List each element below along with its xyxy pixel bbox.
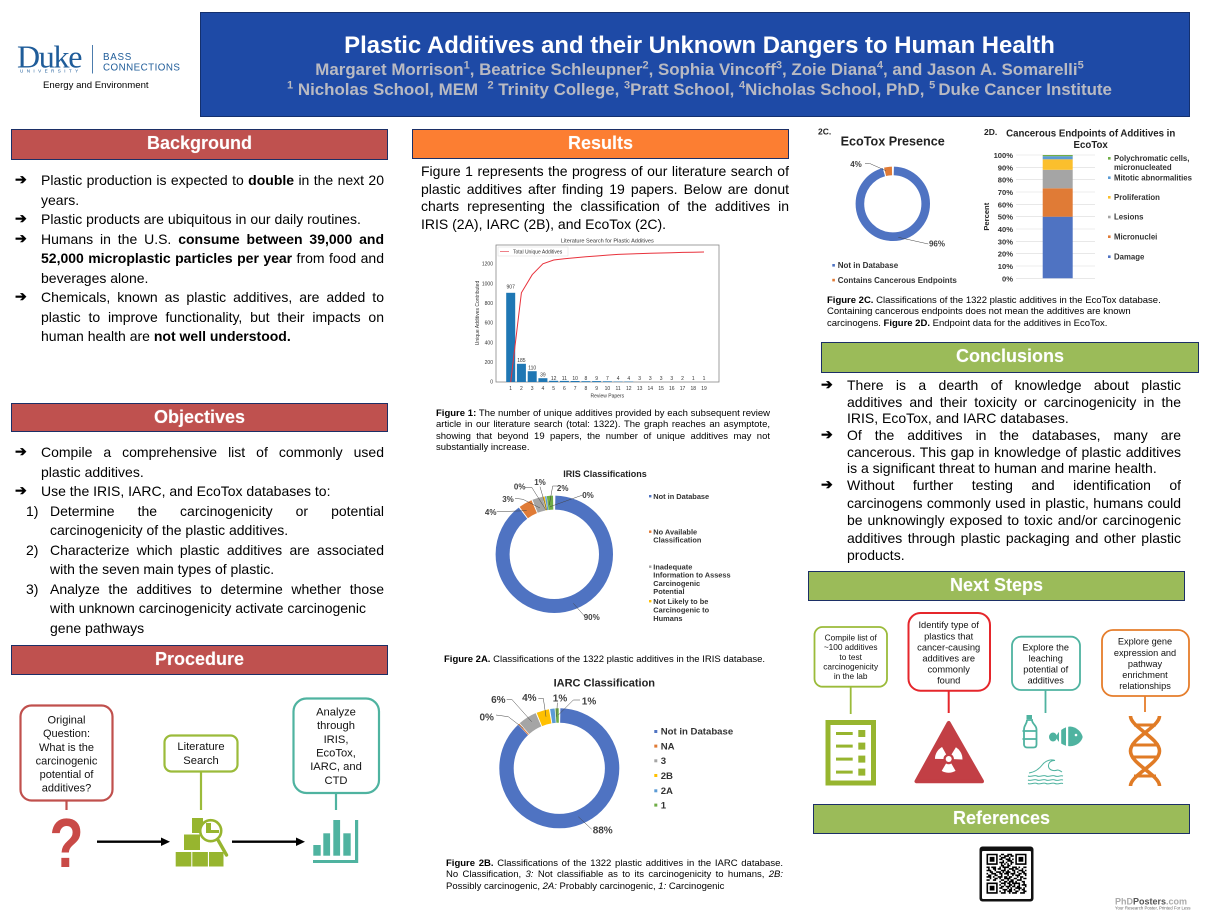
heading: references — [813, 804, 1190, 834]
icon: fish — [1049, 726, 1083, 747]
caption: figure 2B — [446, 858, 783, 892]
callout: original question — [20, 706, 112, 810]
panel: objectives — [11, 403, 388, 636]
caption: figure 1: article in our literature search (total: 1322). The graph reaches an asymptote, — [436, 419, 770, 430]
callout: original question: What is the — [39, 742, 94, 754]
chart: literature search bar and line chart: 10 — [572, 376, 578, 382]
caption: figure 1: Figure 1: The number of unique additives provided by each subsequent review — [436, 408, 770, 419]
chart: cancerous endpoints stacked bar: 30% — [998, 237, 1013, 246]
text block: background bullets: human health are not well understood. — [41, 328, 291, 344]
flow diagram: procedure — [19, 697, 380, 882]
callout: identify plastics — [908, 613, 990, 713]
chart: IRIS classifications donut: 90% — [584, 613, 600, 622]
chart: cancerous endpoints stacked bar: 60% — [998, 200, 1013, 209]
logo: PhDPosters: PhDPosters.com — [1115, 896, 1187, 906]
chart: literature search bar and line chart: 2 — [681, 376, 684, 382]
heading: procedure: Procedure — [155, 649, 244, 669]
caption: figures 2C and 2D — [827, 295, 1161, 329]
panel: background — [11, 129, 388, 344]
callout: analyze: Analyze — [316, 706, 356, 718]
callout: original question: Question: — [43, 728, 90, 740]
chart: literature search bar and line chart: 9 — [595, 386, 598, 392]
chart: cancerous endpoints stacked bar: Micronuclei — [1114, 232, 1157, 241]
text block: objectives list: Use the IRIS, IARC, and EcoTox databases to: — [41, 483, 330, 499]
chart: IARC classification donut: NA — [661, 741, 675, 752]
chart: IRIS classifications donut: Carcinogenic — [653, 579, 700, 588]
chart: cancerous endpoints stacked bar — [982, 127, 1193, 283]
callout: gene expression: Explore gene — [1118, 637, 1172, 647]
icon: wave — [1028, 760, 1063, 784]
text block: results intro: Figure 1 represents the progress of our literature search of — [421, 163, 789, 179]
callout: leaching potential — [1012, 637, 1080, 713]
callout: literature search — [164, 736, 238, 810]
text block: conclusions bullets: ➔ — [821, 377, 833, 393]
callout: analyze: CTD — [324, 775, 348, 787]
text block: results intro: charts representing the classification of the additives in — [421, 198, 789, 214]
text block: objectives list: ➔ — [15, 444, 27, 460]
text block: conclusions bullets: additives and their toxicity or carcinogenicity in the — [847, 394, 1181, 410]
panel: next steps — [808, 571, 1190, 786]
chart: literature search bar and line chart: 5 — [552, 386, 555, 392]
chart: cancerous endpoints stacked bar: EcoTox — [1074, 140, 1108, 151]
callout: leaching potential: additives — [1028, 676, 1064, 686]
chart: IRIS classifications donut: Potential — [653, 587, 685, 596]
chart: IARC classification donut: 2A — [661, 786, 673, 797]
chart: IRIS classifications donut: 2% — [557, 484, 568, 493]
chart: cancerous endpoints stacked bar: 20% — [998, 250, 1013, 259]
text block: background bullets: Humans in the U.S. consume between 39,000 and — [41, 230, 384, 246]
text block: objectives list: plastic additives. — [41, 464, 144, 480]
chart: IRIS classifications donut: Carcinogenic to — [653, 606, 710, 615]
chart: EcoTox presence donut: Contains Cancerous Endpoints — [838, 276, 957, 285]
chart: literature search bar and line chart: 1200 — [482, 262, 493, 268]
callout: literature search: Search — [183, 755, 219, 767]
chart: cancerous endpoints stacked bar: Percent — [982, 202, 991, 231]
chart: IRIS classifications donut: 0% — [514, 482, 525, 492]
chart: IRIS classifications donut: 1% — [534, 478, 546, 487]
chart: literature search bar and line chart: Total Unique Additives — [513, 249, 563, 255]
caption: figure 1: showing that beyond 19 papers, the number of unique additives may not — [436, 431, 770, 442]
chart: literature search bar and line chart: 3 — [531, 386, 534, 392]
heading: objectives: Objectives — [154, 407, 245, 427]
chart: literature search bar and line chart: 185 — [517, 358, 526, 364]
heading: conclusions — [821, 342, 1199, 373]
chart: cancerous endpoints stacked bar: Mitotic abnormalities — [1114, 173, 1193, 182]
heading: conclusions: Conclusions — [956, 346, 1064, 366]
text block: background bullets: ➔ — [15, 211, 27, 227]
chart: IARC classification donut: 2B — [661, 771, 673, 782]
text block: background bullets: beverages alone. — [41, 270, 148, 286]
heading: background: Background — [147, 133, 252, 153]
icon: bottle — [1022, 715, 1036, 748]
text block: background bullets: Plastic production is expected to double in the next 20 — [41, 172, 384, 188]
callout: analyze — [294, 698, 379, 810]
chart: literature search bar and line chart: 110 — [528, 366, 536, 372]
icon: boxes and magnifier — [176, 818, 226, 866]
caption: figure 2B: No Classification, 3: Not classifiable as to its carcinogenicity to humans, 2B: — [446, 869, 783, 880]
chart: IARC classification donut: 6% — [491, 695, 506, 706]
callout: original question: Original — [48, 714, 85, 726]
icon: checklist — [828, 722, 874, 783]
text block: conclusions bullets: be unknowingly exposed to toxic and/or carcinogenic — [847, 512, 1181, 528]
callout: analyze: EcoTox, — [316, 748, 356, 760]
text block: conclusions bullets: additives through plastic packaging and other plastic — [847, 530, 1181, 546]
chart: cancerous endpoints stacked bar: Proliferation — [1114, 193, 1160, 202]
chart: literature search bar and line chart: 3 — [660, 376, 663, 382]
chart: IRIS classifications donut: IRIS Classifications — [563, 469, 647, 479]
chart: literature search bar and line chart: 600 — [485, 321, 493, 327]
QR code — [980, 846, 1034, 902]
chart: cancerous endpoints stacked bar: 70% — [998, 188, 1013, 197]
icon: bar chart — [313, 820, 358, 863]
arrow: search to analysis — [232, 838, 305, 846]
chart: literature search bar and line chart: 2 — [520, 386, 523, 392]
text block: conclusions bullets: Of the additives in the databases, many are — [847, 427, 1181, 443]
chart: IRIS classifications donut: 3% — [502, 495, 514, 504]
text block: objectives list: carcinogenicity of the plastic additives. — [50, 522, 288, 538]
text block: objectives list: Compile a comprehensive list of commonly used — [41, 444, 384, 460]
chart: literature search bar and line chart: 12 — [626, 386, 632, 392]
logo: Duke University Bass Connections: Energy and Environment — [43, 80, 149, 91]
chart: EcoTox presence donut: 96% — [929, 240, 945, 248]
text block: conclusions bullets: ➔ — [821, 427, 833, 443]
chart: literature search bar and line chart: 3 — [649, 376, 652, 382]
text block: objectives list: 1) — [26, 502, 38, 518]
chart: literature search bar and line chart: 19 — [701, 386, 707, 392]
chart: literature search bar and line chart: 13 — [637, 386, 643, 392]
chart: cancerous endpoints stacked bar: 10% — [998, 262, 1013, 271]
callout: analyze: IRIS, — [324, 734, 348, 746]
text block: conclusions bullets: is a significant threat to human and marine health. — [847, 460, 1157, 476]
chart: literature search bar and line chart: 17 — [680, 386, 685, 392]
chart: literature search bar and line chart: 1 — [692, 376, 695, 382]
title banner — [200, 12, 1190, 117]
text block: objectives list: gene pathways — [50, 620, 144, 636]
chart: IARC classification donut — [479, 678, 733, 837]
chart: EcoTox presence donut — [818, 126, 957, 285]
chart: EcoTox presence donut: 4% — [850, 160, 862, 169]
text block: results intro — [421, 163, 789, 232]
chart: literature search bar and line chart: 3 — [670, 376, 673, 382]
heading: background — [11, 129, 388, 160]
text block: conclusions bullets: IRIS, EcoTox, and IARC databases. — [847, 410, 1069, 426]
caption: figure 2B: Possibly carcinogenic, 2A: Probably carcinogenic, 1: Carcinogenic — [446, 881, 724, 892]
callout: leaching potential: leaching — [1029, 653, 1063, 663]
chart: literature search bar and line chart: 400 — [485, 340, 493, 346]
chart: IRIS classifications donut: Humans — [653, 614, 682, 623]
text block: conclusions bullets: cancerous. This gap in knowledge of plastic additives — [847, 444, 1181, 460]
text block: conclusions bullets: Without further testing and identification of — [847, 477, 1181, 493]
chart: literature search bar and line chart: 1000 — [482, 281, 493, 287]
callout: gene expression: relationships — [1119, 681, 1171, 691]
authors: Margaret Morrison1, Beatrice Schleupner2, Sophia Vincoff3, Zoie Diana4, and Jason A. Somarelli5 — [315, 59, 1084, 79]
chart: literature search bar and line chart: 0 — [490, 380, 493, 386]
caption: figure 1: substantially increase. — [436, 442, 529, 453]
chart: IRIS classifications donut: No Available — [653, 527, 697, 536]
chart: cancerous endpoints stacked bar: Polychromatic cells, — [1114, 154, 1189, 163]
text block: conclusions bullets: ➔ — [821, 477, 833, 493]
chart: cancerous endpoints stacked bar: 50% — [998, 213, 1013, 222]
chart: literature search bar and line chart: 8 — [585, 376, 588, 382]
chart: literature search bar and line chart: 4 — [542, 386, 545, 392]
text block: objectives list: 3) — [26, 580, 38, 596]
text block: background bullets: ➔ — [15, 289, 27, 305]
caption: figures 2C and 2D: Figure 2C. Classifications of the 1322 plastic additives in the EcoTox database. — [827, 295, 1161, 306]
caption: figures 2C and 2D: Containing cancerous endpoints does not mean the additives are known — [827, 306, 1131, 317]
chart: IRIS classifications donut — [485, 469, 731, 623]
text block: results intro: IRIS (2A), IARC (2B), and EcoTox (2C). — [421, 216, 666, 232]
chart: literature search bar and line chart: 14 — [648, 386, 653, 392]
callout: compile list: in the lab — [834, 671, 868, 681]
chart: literature search bar and line chart: 200 — [485, 360, 493, 366]
chart: literature search bar and line chart: 15 — [658, 386, 664, 392]
logo: Duke University Bass Connections — [17, 38, 180, 91]
chart: IARC classification donut: Not in Database — [661, 727, 733, 738]
callout: leaching potential: Explore the — [1022, 642, 1069, 652]
text block: objectives list: with the seven main types of plastic. — [50, 561, 274, 577]
text block: background bullets — [15, 172, 384, 344]
chart: IRIS classifications donut: Information to Assess — [653, 571, 731, 580]
callout: leaching potential: potential of — [1023, 664, 1069, 674]
chart: cancerous endpoints stacked bar: micronucleated — [1114, 163, 1172, 172]
chart: IARC classification donut: 1 — [661, 800, 667, 811]
panel: conclusions — [821, 342, 1199, 563]
text block: results intro: plastic additives after finding 19 papers. Below are donut — [421, 180, 789, 196]
heading: references: References — [953, 808, 1050, 828]
callout: gene expression — [1102, 630, 1189, 712]
caption: figure 2A: Figure 2A. Classifications of the 1322 plastic additives in the IRIS database. — [444, 654, 765, 665]
chart: literature search bar and line chart: Literature Search for Plastic Additives — [561, 238, 654, 244]
icon: radiation warning triangle — [916, 723, 982, 781]
chart: cancerous endpoints stacked bar: 100% — [994, 151, 1013, 160]
chart: literature search bar and line chart: 3 — [638, 376, 641, 382]
chart: IARC classification donut: IARC Classification — [554, 678, 655, 690]
chart: literature search bar and line chart: 7 — [574, 386, 577, 392]
chart: IARC classification donut: 88% — [593, 826, 613, 837]
chart: IRIS classifications donut: Not in Database — [653, 492, 709, 501]
chart: literature search bar and line chart: 18 — [691, 386, 696, 392]
callout: gene expression: expression and — [1114, 648, 1176, 658]
callout: compile list — [814, 627, 887, 714]
chart: literature search bar and line chart — [475, 238, 720, 400]
callout: original question: potential of — [40, 769, 94, 781]
logo: Duke University Bass Connections: CONNECTIONS — [103, 62, 180, 74]
affiliations: 1 Nicholas School, MEM 2 Trinity College, 3Pratt School, 4Nicholas School, PhD, 5 Duke Cancer Institute — [287, 79, 1112, 99]
chart: literature search bar and line chart: 1 — [703, 376, 706, 382]
text block: background bullets: ➔ — [15, 230, 27, 246]
logo: Duke University Bass Connections: BASS — [103, 52, 132, 63]
text block: background bullets: 52,000 microplastic particles per year from food and — [41, 250, 384, 266]
chart: literature search bar and line chart: 12 — [551, 376, 557, 382]
chart: cancerous endpoints stacked bar: 90% — [998, 163, 1013, 172]
chart: literature search bar and line chart: 800 — [485, 301, 493, 307]
chart: literature search bar and line chart: 10 — [605, 386, 610, 392]
title: Plastic Additives and their Unknown Dangers to Human Health — [344, 32, 1055, 59]
text block: background bullets: years. — [41, 192, 79, 208]
text block: background bullets: Plastic products are ubiquitous in our daily routines. — [41, 211, 361, 227]
chart: literature search bar and line chart: 9 — [595, 376, 598, 382]
text block: background bullets: Chemicals, known as plastic additives, are added to — [41, 289, 384, 305]
text block: conclusions bullets: There is a dearth of knowledge about plastic — [847, 377, 1181, 393]
chart: EcoTox presence donut: Not in Database — [838, 261, 899, 270]
callout: gene expression: pathway — [1128, 659, 1163, 669]
callout: analyze: IARC, and — [310, 761, 362, 773]
chart: literature search bar and line chart: 11 — [562, 376, 567, 382]
callout: identify plastics: Identify type of — [918, 620, 979, 630]
icon: question mark: ? — [49, 805, 84, 882]
panel: results — [412, 129, 789, 892]
callout: gene expression: enrichment — [1122, 670, 1168, 680]
chart: IARC classification donut: 0% — [479, 712, 494, 723]
chart: cancerous endpoints stacked bar: Damage — [1114, 252, 1145, 261]
chart: literature search bar and line chart: 6 — [563, 386, 566, 392]
caption: figure 1 — [436, 408, 770, 453]
chart: IARC classification donut: 1% — [582, 696, 596, 707]
text block: objectives list — [15, 444, 384, 636]
chart: literature search bar and line chart: 4 — [617, 376, 620, 382]
chart: literature search bar and line chart: 907 — [507, 284, 515, 290]
text block: conclusions bullets: carcinogens commonly used in plastic, humans could — [847, 494, 1181, 510]
text block: objectives list: Determine the carcinogenicity or potential — [50, 502, 384, 518]
diagram: next steps — [814, 612, 1190, 786]
caption: figures 2C and 2D: carcinogens. Figure 2D. Endpoint data for the additives in EcoTox. — [827, 318, 1107, 329]
callout: identify plastics: plastics that — [924, 631, 974, 641]
chart: literature search bar and line chart: 7 — [606, 376, 609, 382]
chart: IRIS classifications donut: Inadequate — [653, 562, 692, 571]
chart: IRIS classifications donut: 0% — [582, 491, 594, 500]
chart: literature search bar and line chart: 11 — [615, 386, 621, 392]
callout: analyze: through — [317, 720, 355, 732]
callout: identify plastics: found — [937, 676, 960, 686]
chart: literature search bar and line chart: 4 — [627, 376, 630, 382]
text block: objectives list: 2) — [26, 542, 38, 558]
callout: original question: additives? — [42, 782, 91, 794]
callout: compile list: carcinogenicity — [823, 662, 879, 672]
chart: cancerous endpoints stacked bar: Lesions — [1114, 213, 1144, 222]
chart: EcoTox presence donut: EcoTox Presence — [841, 134, 945, 148]
logo: Duke University Bass Connections: Duke — [17, 38, 82, 74]
chart: cancerous endpoints stacked bar: Cancerous Endpoints of Additives in — [1006, 129, 1175, 140]
chart: literature search bar and line chart: 39 — [540, 372, 546, 378]
chart: literature search bar and line chart: 8 — [585, 386, 588, 392]
text block: background bullets: ➔ — [15, 172, 27, 188]
logo: Duke University Bass Connections: UNIVERSITY — [20, 68, 82, 74]
heading: next steps: Next Steps — [950, 575, 1043, 595]
arrow: question to search — [97, 838, 170, 846]
callout: identify plastics: commonly — [928, 665, 970, 675]
text block: background bullets: plastic to improve functionality, but their impacts on — [41, 308, 384, 324]
heading: next steps — [808, 571, 1185, 601]
chart: IRIS classifications donut: 4% — [485, 508, 496, 517]
callout: identify plastics: additives are — [922, 653, 975, 663]
chart: cancerous endpoints stacked bar: 80% — [998, 176, 1013, 185]
heading: procedure — [11, 645, 388, 675]
chart: IARC classification donut: 4% — [522, 693, 537, 704]
callout: compile list: to test — [839, 652, 863, 662]
heading: results: Results — [568, 133, 633, 153]
icon: DNA helix — [1130, 716, 1160, 786]
chart: literature search bar and line chart: 1 — [509, 386, 512, 392]
heading: objectives — [11, 403, 388, 432]
chart: cancerous endpoints stacked bar: 2D. — [984, 127, 997, 137]
chart: literature search bar and line chart: Review Papers — [590, 394, 625, 400]
chart: IRIS classifications donut: Not Likely to be — [653, 597, 708, 606]
chart: IARC classification donut: 3 — [661, 756, 666, 767]
callout: compile list: ~100 additives — [824, 642, 878, 652]
text block: objectives list: with unknown carcinogenicity activate carcinogenic — [50, 600, 366, 616]
panel: procedure — [11, 645, 388, 882]
text block: objectives list: ➔ — [15, 483, 27, 499]
callout: original question: carcinogenic — [36, 756, 98, 768]
heading: results — [412, 129, 789, 159]
chart: literature search bar and line chart: Unique Additives Contributed — [475, 281, 481, 345]
chart: literature search bar and line chart: 16 — [669, 386, 675, 392]
text block: objectives list: Analyze the additives to determine whether those — [50, 580, 384, 596]
chart: EcoTox presence donut: 2C. — [818, 126, 831, 136]
chart: IARC classification donut: 1% — [553, 694, 567, 705]
callout: literature search: Literature — [177, 741, 225, 753]
chart: cancerous endpoints stacked bar: 40% — [998, 225, 1013, 234]
chart: IRIS classifications donut: Classification — [653, 536, 702, 545]
text block: conclusions bullets: products. — [847, 547, 905, 563]
callout: compile list: Compile list of — [825, 632, 877, 642]
text block: objectives list: Characterize which plastic additives are associated — [50, 542, 384, 558]
chart: cancerous endpoints stacked bar: 0% — [1002, 274, 1013, 283]
text block: conclusions bullets — [821, 377, 1181, 563]
callout: identify plastics: cancer-causing — [917, 642, 980, 652]
